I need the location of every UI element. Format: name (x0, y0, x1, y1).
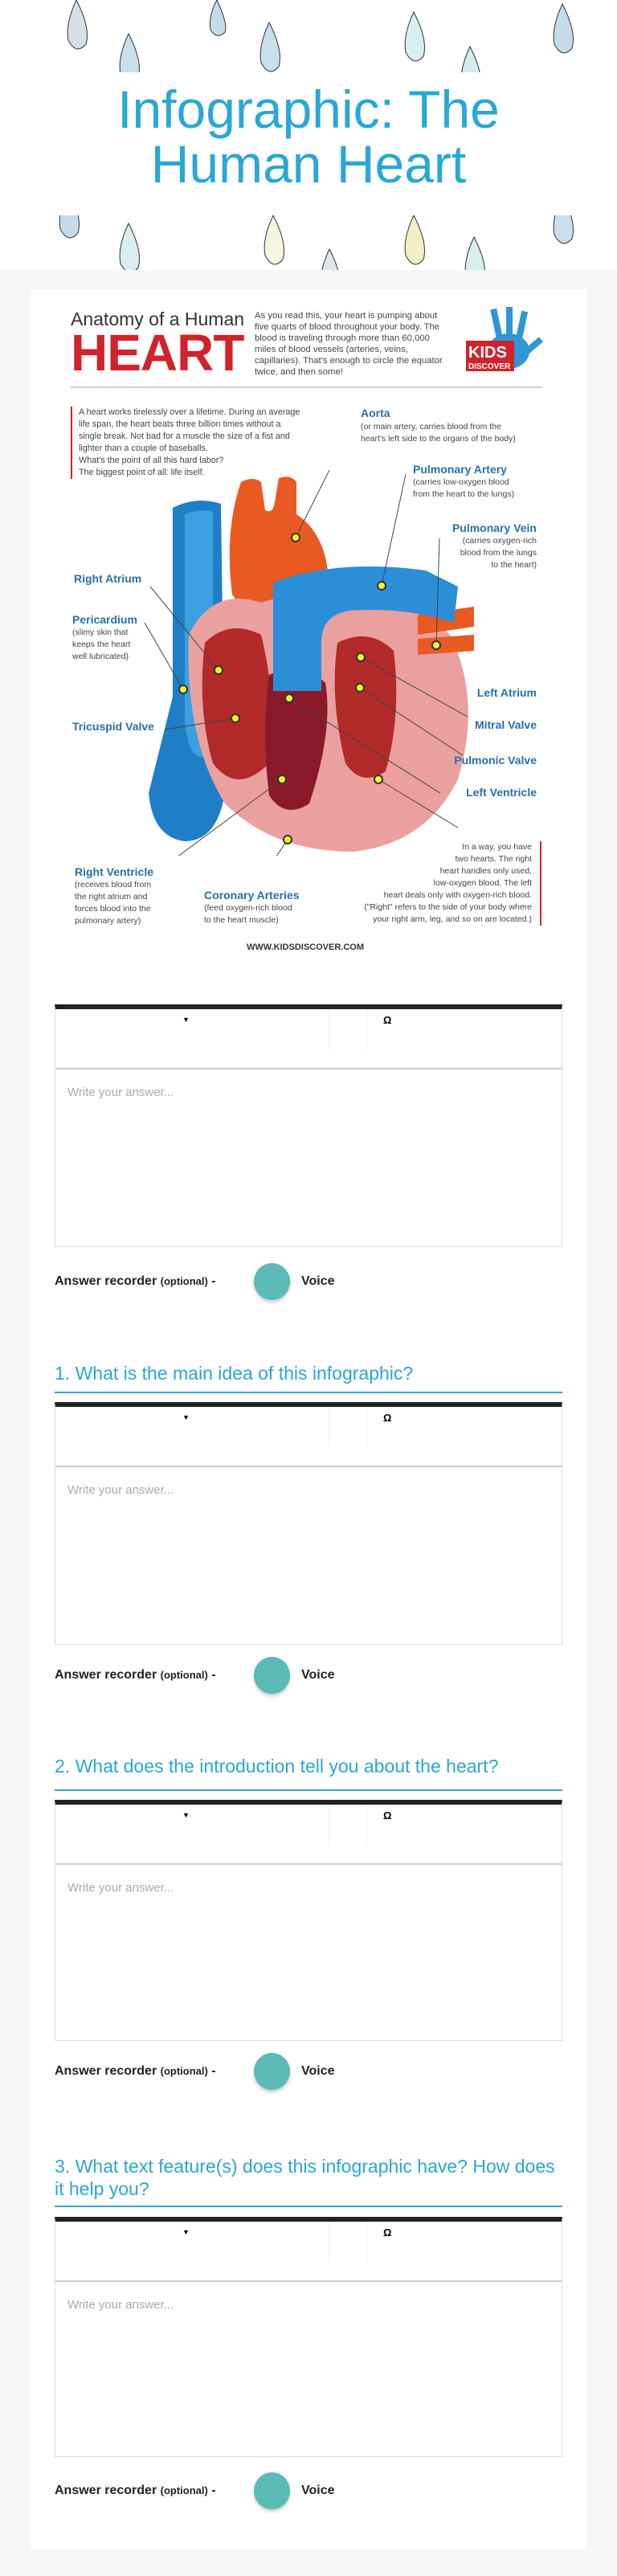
answer box 3: Write your answer... (67, 2298, 174, 2312)
text: Left Ventricle (466, 786, 537, 799)
text: heart's left side to the organs of the body) (361, 434, 516, 444)
intro paragraph: As you read this, your heart is pumping about five quarts of blood throughout your body. The blood is traveling through more than 60,000 miles of blood vessels (arteries, veins, capillaries). That's enough to circle the equator twice, and then some! (255, 311, 443, 377)
text: Coronary Arteries (204, 889, 300, 902)
answer box 1: Write your answer... (67, 1483, 174, 1497)
infographic header: Anatomy of a Human HEART: HEART (71, 324, 243, 382)
answer box 1 (55, 1402, 562, 1645)
text: Answer recorder (optional) - (55, 1668, 216, 1682)
text block: two hearts: ("Right" refers to the side of your body where (364, 902, 532, 912)
text: forces blood into the (75, 904, 151, 914)
text: Answer recorder (optional) - (55, 2484, 216, 2497)
text block: two hearts (329, 841, 541, 926)
text block: two hearts: heart deals only with oxygen-rich blood. (384, 890, 532, 900)
text block: lifetime intro: The biggest point of all: life itself. (79, 468, 205, 477)
answer box 2: Ω (383, 1809, 391, 1822)
text block: two hearts: two hearts. The right (455, 854, 532, 864)
text: well lubricated) (72, 652, 129, 661)
text: Pericardium (72, 613, 137, 626)
text block: two hearts: In a way, you have (462, 842, 532, 852)
icon: Kids Discover logo: DISCOVER (468, 362, 511, 371)
header: raindrop pattern (0, 0, 617, 270)
text: Voice (301, 2064, 334, 2078)
answer recorder 3 (55, 2472, 334, 2513)
answer box 0: ▼ (182, 1016, 190, 1024)
question 1 heading: 1. What is the main idea of this infographic? (55, 1363, 413, 1384)
question 2 heading: 2. What does the introduction tell you about the heart? (55, 1756, 498, 1777)
text: Tricuspid Valve (72, 720, 154, 733)
text: from the heart to the lungs) (413, 489, 514, 499)
answer box 2: ▼ (182, 1811, 190, 1819)
answer recorder 1 (55, 1657, 334, 1698)
text: (slimy skin that (72, 628, 128, 637)
text block: lifetime intro: What's the point of all this hard labor? (79, 456, 223, 465)
text block: two hearts: heart handles only used, (440, 866, 532, 876)
icon: Kids Discover logo (466, 307, 543, 371)
text: Left Atrium (477, 686, 537, 699)
icon: Kids Discover logo: KIDS (468, 344, 507, 362)
text: Mitral Valve (475, 718, 537, 731)
text block: lifetime intro (71, 407, 305, 479)
text: (carries oxygen-rich (463, 536, 537, 546)
answer recorder 0 (55, 1263, 334, 1304)
text: keeps the heart (72, 640, 130, 649)
answer box 0: Ω (383, 1014, 391, 1026)
source url: WWW.KIDSDISCOVER.COM (247, 942, 364, 952)
text: the right atrium and (75, 892, 147, 902)
answer recorder 2 (55, 2053, 334, 2094)
text: (carries low-oxygen blood (413, 477, 509, 487)
text: Answer recorder (optional) - (55, 1274, 216, 1288)
text: Voice (301, 2484, 334, 2497)
answer box 3: ▼ (182, 2228, 190, 2236)
answer box 1: Ω (383, 1412, 391, 1424)
text: blood from the lungs (460, 548, 537, 558)
text: Right Atrium (74, 572, 141, 585)
answer box 3: Ω (383, 2226, 391, 2239)
text: to the heart) (491, 560, 537, 570)
title: Infographic: The (117, 80, 500, 139)
main card (31, 289, 586, 2549)
answer box 2 (55, 1800, 562, 2041)
title (117, 80, 500, 194)
text: to the heart muscle) (204, 915, 279, 925)
text: pulmonary artery) (75, 916, 141, 926)
title: Human Heart (151, 134, 466, 194)
answer box 0 (55, 1004, 562, 1247)
heart illustration (145, 470, 474, 856)
text: (or main artery, carries blood from the (361, 422, 501, 431)
text: (receives blood from (75, 880, 151, 889)
answer box 0: Write your answer... (67, 1086, 174, 1099)
labels: Aorta (361, 407, 390, 419)
text: Pulmonary Vein (452, 521, 537, 534)
text block: two hearts: your right arm, leg, and so on are located.) (373, 914, 532, 924)
text: Pulmonary Artery (413, 463, 507, 476)
question 3 heading: 3. What text feature(s) does this infographic have? How does it help you? (55, 2156, 555, 2199)
text: Answer recorder (optional) - (55, 2064, 216, 2078)
answer box 1: ▼ (182, 1413, 190, 1421)
text: Pulmonic Valve (454, 754, 537, 767)
answer box 2: Write your answer... (67, 1881, 174, 1895)
infographic header: Anatomy of a Human HEART: Anatomy of a Human (71, 309, 244, 329)
answer box 3 (55, 2217, 562, 2457)
text: Voice (301, 1668, 334, 1682)
text block: lifetime intro: A heart works tirelessly over a lifetime. During an average life span, the heart beats three billion times without a single break. Not bad for a muscle the size of a fist and lighter than a couple of baseballs. (79, 407, 300, 453)
text: Voice (301, 1274, 334, 1288)
text block: two hearts: low-oxygen blood. The left (434, 878, 532, 888)
text: (feed oxygen-rich blood (204, 903, 292, 913)
text: Right Ventricle (75, 865, 153, 878)
